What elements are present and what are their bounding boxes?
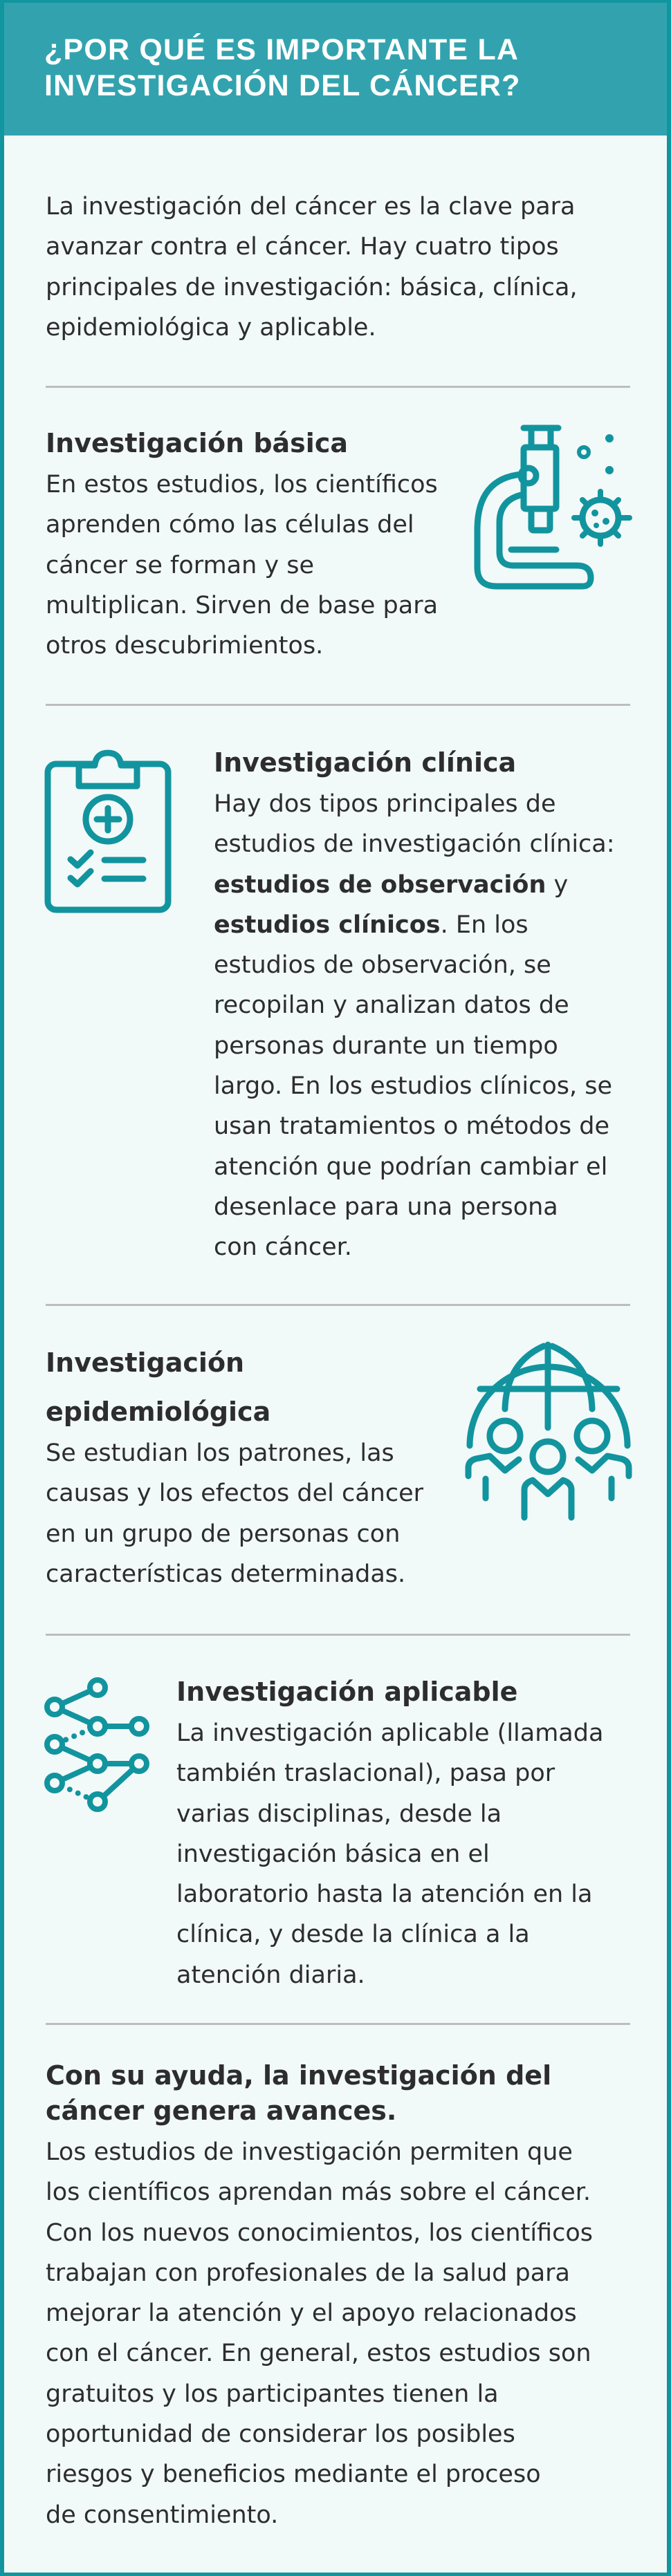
text: clínica: estudios de investigación clínica: <box>214 830 615 858</box>
heading: epidemiológica: epidemiológica <box>46 1397 270 1427</box>
heading: epidemiológica: Investigación <box>46 1347 244 1378</box>
intro text <box>46 193 578 342</box>
text: básica: cáncer se forman y se <box>46 552 314 579</box>
section: investigación básica <box>46 428 438 660</box>
text: conclusión <box>46 2138 593 2529</box>
text: clínica: personas durante un tiempo <box>214 1032 558 1060</box>
text: conclusión: los científicos aprendan más sobre el cáncer. <box>46 2178 591 2206</box>
text: básica: otros descubrimientos. <box>46 632 323 660</box>
text: aplicable: investigación básica en el <box>176 1840 490 1868</box>
text: conclusión: gratuitos y los participantes tienen la <box>46 2380 499 2408</box>
heading: básica: Investigación básica <box>46 428 348 458</box>
icon: clipboard <box>44 749 172 913</box>
heading: epidemiológica <box>46 1347 270 1427</box>
text: epidemiológica <box>46 1439 423 1588</box>
section: investigación epidemiológica <box>46 1347 423 1588</box>
text: conclusión: Los estudios de investigación permiten que <box>46 2138 573 2166</box>
text: clínica: usan tratamientos o métodos de <box>214 1112 609 1140</box>
text: aplicable: también traslacional), pasa por <box>176 1760 555 1787</box>
text: clínica: desenlace para una persona <box>214 1193 558 1221</box>
heading: aplicable: Investigación aplicable <box>176 1677 517 1707</box>
text: clínica: estudios de observación, se <box>214 951 551 979</box>
intro text: avanzar contra el cáncer. Hay cuatro tipos <box>46 233 559 261</box>
text: básica: multiplican. Sirven de base para <box>46 592 438 619</box>
text: clínica: estudios de observación y <box>214 871 568 899</box>
title <box>44 33 521 102</box>
heading: conclusión: cáncer genera avances. <box>46 2096 396 2126</box>
intro text: principales de investigación: básica, clínica, <box>46 274 578 301</box>
text: clínica: Hay dos tipos principales de <box>214 790 556 818</box>
text: clínica <box>214 790 615 1261</box>
text: aplicable: clínica, y desde la clínica a la <box>176 1921 530 1948</box>
text: aplicable: atención diaria. <box>176 1961 365 1989</box>
title: INVESTIGACIÓN DEL CÁNCER? <box>44 69 521 102</box>
text: aplicable <box>176 1719 603 1989</box>
text: epidemiológica: causas y los efectos del cáncer <box>46 1480 423 1507</box>
text: conclusión: riesgos y beneficios mediante el proceso <box>46 2461 541 2488</box>
text: conclusión: Con los nuevos conocimientos, los científicos <box>46 2219 593 2247</box>
heading: conclusión: Con su ayuda, la investigación del <box>46 2060 551 2091</box>
text: conclusión: mejorar la atención y el apoyo relacionados <box>46 2299 577 2327</box>
text: clínica: con cáncer. <box>214 1233 352 1261</box>
icon: network <box>44 1677 149 1812</box>
text: básica: aprenden cómo las células del <box>46 511 414 539</box>
intro text: epidemiológica y aplicable. <box>46 314 376 342</box>
text: aplicable: varias disciplinas, desde la <box>176 1800 502 1828</box>
text: epidemiológica: características determinadas. <box>46 1560 405 1588</box>
text: conclusión: trabajan con profesionales de la salud para <box>46 2259 570 2287</box>
icon: globe with people <box>465 1341 632 1521</box>
text: conclusión: de consentimiento. <box>46 2501 278 2529</box>
section: conclusión <box>46 2060 593 2529</box>
text: aplicable: La investigación aplicable (llamada <box>176 1719 603 1747</box>
text: conclusión: oportunidad de considerar los posibles <box>46 2420 515 2448</box>
heading: conclusión <box>46 2060 551 2126</box>
text: conclusión: con el cáncer. En general, estos estudios son <box>46 2340 591 2367</box>
icon: microscope <box>475 424 632 589</box>
text: clínica: atención que podrían cambiar el <box>214 1153 607 1181</box>
text: epidemiológica: Se estudian los patrones, las <box>46 1439 394 1467</box>
text: clínica: estudios clínicos. En los <box>214 911 528 939</box>
title: ¿POR QUÉ ES IMPORTANTE LA <box>44 33 519 66</box>
text: aplicable: laboratorio hasta la atención en la <box>176 1880 592 1908</box>
section: investigación clínica <box>214 747 615 1261</box>
text: básica: En estos estudios, los científicos <box>46 471 438 498</box>
intro text: La investigación del cáncer es la clave para <box>46 193 576 221</box>
heading: clínica: Investigación clínica <box>214 747 516 778</box>
text: clínica: largo. En los estudios clínicos, se <box>214 1072 612 1100</box>
text: epidemiológica: en un grupo de personas con <box>46 1520 400 1548</box>
header band <box>4 3 667 136</box>
text: básica <box>46 471 438 660</box>
text: clínica: recopilan y analizan datos de <box>214 991 569 1019</box>
section: investigación aplicable <box>176 1677 603 1989</box>
